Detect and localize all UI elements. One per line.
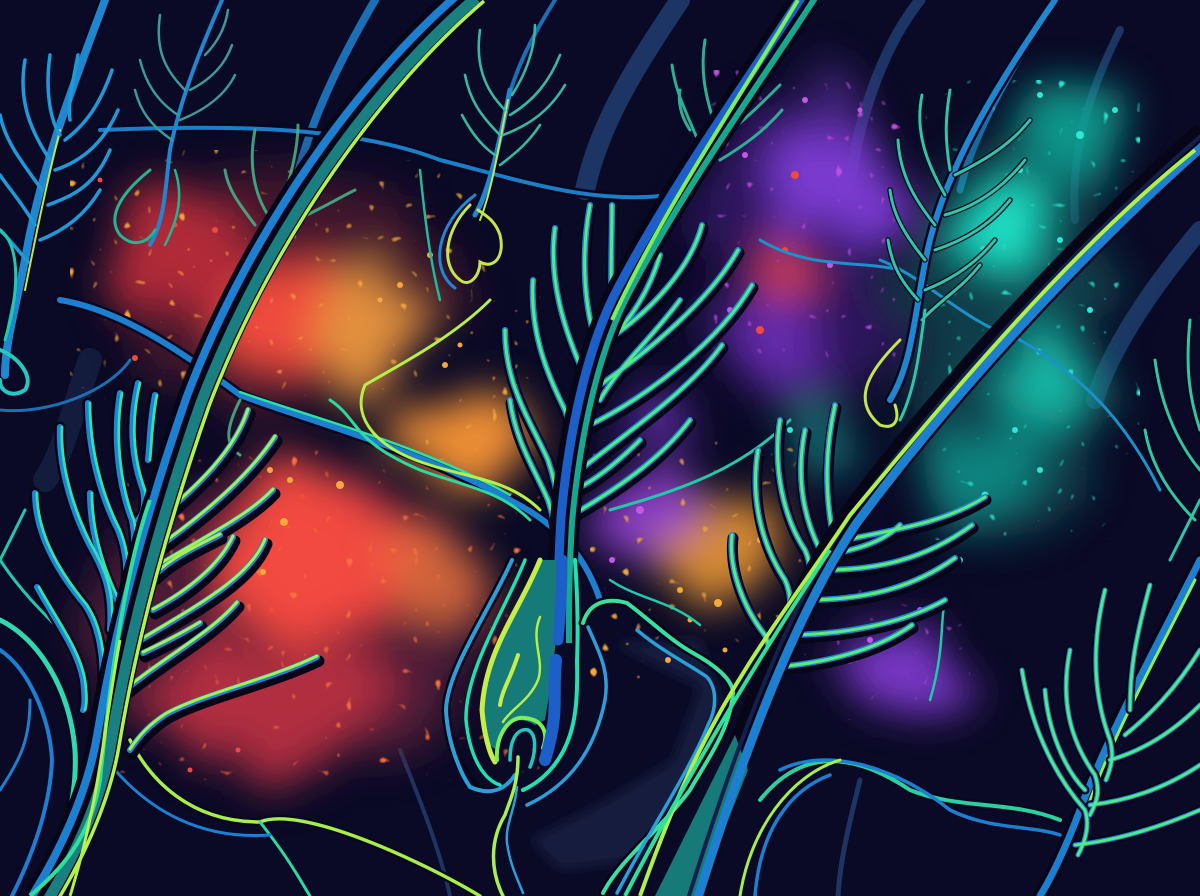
cloud: red upper left: [105, 190, 255, 320]
cloud: teal middle: [1000, 335, 1090, 435]
vein: bottom right: [760, 761, 1060, 820]
vein: right: [880, 260, 1160, 490]
bottom-left root lines: [0, 510, 75, 896]
cloud: purple lower right: [815, 620, 965, 720]
cloud: red-orange centre: [220, 260, 340, 380]
feather A: large left: [30, 0, 484, 896]
follicle bulb: centre: [446, 560, 733, 896]
feather B: centre: [505, 0, 815, 643]
cloud: purple middle: [600, 482, 700, 558]
feather: right edge: [1145, 320, 1200, 560]
colour clouds: [90, 62, 1125, 770]
small feather: top left: [0, 0, 118, 394]
small feather: behind orange: [225, 125, 355, 455]
cloud: purple top: [760, 135, 890, 245]
vein: left bottom: [130, 740, 480, 896]
vein: central diagonal: [60, 300, 600, 600]
small feather: top centre left: [115, 0, 235, 245]
cloud: red lower: [210, 480, 410, 640]
cloud: magenta red core: [752, 238, 808, 302]
cloud: orange right: [675, 490, 775, 610]
feather C: lower right: [625, 134, 1200, 896]
vein: lime orange loop: [361, 300, 540, 510]
feather: bottom right: [1022, 560, 1200, 896]
cloud haze: dark purple: [700, 100, 900, 420]
large paint dots: [98, 92, 1118, 772]
cloud: orange upper: [313, 255, 423, 385]
cloud: deep red lower: [140, 645, 400, 755]
cloud haze: dark teal: [910, 130, 1110, 550]
dark stippled shape behind centre: [530, 640, 720, 870]
feather: upper right teal: [865, 0, 1055, 426]
vein: top horizontal: [100, 128, 670, 197]
cloud haze: dark orange: [110, 170, 450, 410]
cloud: teal upper: [950, 185, 1050, 285]
cloud: orange lower: [380, 525, 480, 625]
small feather: top right of centre: [672, 40, 782, 160]
small feather: top centre: [440, 25, 565, 288]
cloud: orange middle: [400, 382, 540, 478]
scattered paint particles: [70, 70, 1140, 780]
cloud haze: dark red: [90, 470, 490, 770]
